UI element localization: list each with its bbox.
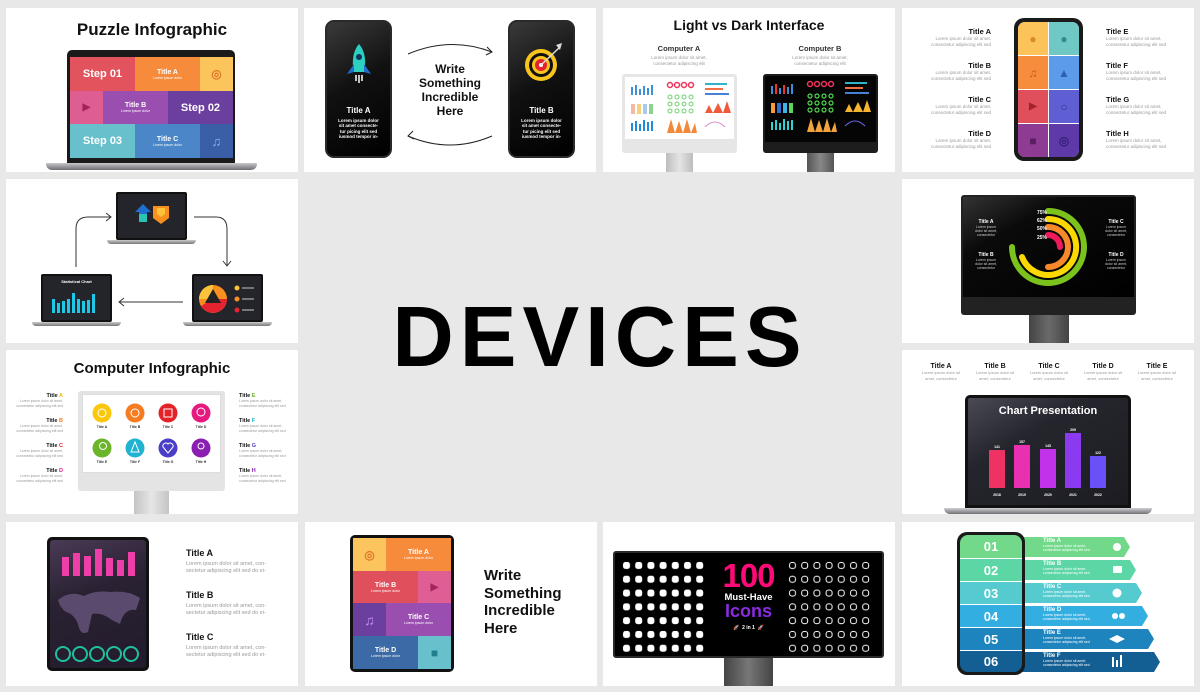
right titles E-H: Title H bbox=[239, 468, 256, 474]
titles A-C: sectetur adipiscing elit sed do ei- bbox=[186, 610, 266, 616]
column titles A-E: Lorem ipsum dolor sit bbox=[1084, 370, 1122, 375]
titles A B: dolor sit amet, bbox=[975, 262, 997, 266]
text: Write Something Incredible Here: Here bbox=[484, 620, 517, 636]
monitor: 100 bbox=[722, 557, 775, 594]
tile: 100 must-have icons monitor bbox=[603, 522, 895, 686]
right titles E-H: Lorem ipsum dolor sit amet, bbox=[239, 474, 282, 478]
laptop with bar chart: 209 bbox=[1070, 428, 1076, 432]
titles A B: dolor sit amet, bbox=[975, 229, 997, 233]
column titles A-E: Lorem ipsum dolor sit bbox=[1030, 370, 1068, 375]
ring chart bbox=[1009, 208, 1087, 286]
left titles A-D: Title D bbox=[968, 129, 991, 138]
puzzle grid: ♫ bbox=[212, 134, 221, 148]
titles A B: consectetur bbox=[977, 233, 995, 237]
titles C D: Title D bbox=[1108, 252, 1124, 258]
text: Write Something Incredible Here bbox=[419, 62, 481, 118]
phone with puzzle: ▲ bbox=[1058, 66, 1070, 80]
column titles A-E: Title D bbox=[1092, 363, 1114, 370]
column titles A-E: amet, consectetur bbox=[1141, 376, 1173, 380]
right titles E-H: consectetur adipiscing elit sed bbox=[1106, 110, 1166, 114]
ring labels: 25% bbox=[1037, 235, 1047, 241]
titles A-C: Lorem ipsum dolor sit amet, con- bbox=[186, 645, 266, 651]
titles A B: Title A bbox=[978, 219, 994, 225]
titles C D: Title C bbox=[1108, 219, 1124, 225]
tablet bbox=[47, 537, 149, 671]
tile: puzzle infographic laptop bbox=[6, 8, 298, 172]
tablet with puzzle: ▶ bbox=[431, 582, 438, 592]
puzzle grid bbox=[70, 57, 233, 158]
phone with numbers: 03 bbox=[984, 586, 998, 600]
titles C D: consectetur bbox=[1107, 233, 1125, 237]
phone A with rocket: Lorem ipsum dolor bbox=[338, 118, 379, 123]
right titles E-H: consectetur adipiscing elit sed bbox=[1106, 144, 1166, 148]
phone B with target: Title B bbox=[529, 106, 554, 115]
text: Write Something Incredible Here: Something bbox=[484, 584, 562, 602]
icon: target bbox=[525, 43, 562, 81]
phone B with target: Lorem ipsum dolor bbox=[521, 118, 562, 123]
phone A with rocket: tur picing elit sed bbox=[340, 129, 377, 134]
right titles E-H: consectetur adipiscing elit sed bbox=[1106, 42, 1166, 46]
right titles E-H: Title G bbox=[1106, 95, 1129, 104]
label: Computer B: Lorem ipsum dolor sit amet, bbox=[792, 55, 848, 60]
left titles A-D: Lorem ipsum dolor sit amet, bbox=[935, 138, 991, 143]
column titles A-E: Title C bbox=[1038, 363, 1060, 370]
puzzle grid: Step 03 bbox=[83, 135, 122, 147]
tablet with puzzle: Lorem ipsum dolor bbox=[404, 621, 433, 625]
titles C D: dolor sit amet, bbox=[1105, 262, 1127, 266]
monitor bbox=[613, 551, 884, 686]
arrow titles: Lorem ipsum dolor sit amet, bbox=[1043, 567, 1086, 571]
phone with puzzle: ○ bbox=[1060, 100, 1068, 114]
phone with puzzle: ▶ bbox=[1029, 101, 1037, 112]
left titles A-D: consectetur adipiscing elit sed bbox=[16, 428, 63, 432]
laptop with bar chart: 122 bbox=[1095, 451, 1101, 455]
column titles A-E bbox=[922, 362, 1176, 380]
label: Computer A: Computer A bbox=[658, 44, 700, 53]
tile: two phones bbox=[304, 8, 596, 172]
ring labels bbox=[1037, 210, 1047, 241]
left titles A-D: Title A bbox=[46, 393, 63, 399]
arrow titles bbox=[1043, 538, 1090, 667]
left titles A-D: Lorem ipsum dolor sit amet, bbox=[20, 424, 63, 428]
left titles A-D: Title A bbox=[968, 27, 991, 36]
right titles E-H: consectetur adipiscing elit sed bbox=[239, 478, 286, 482]
left titles A-D: consectetur adipiscing elit sed bbox=[931, 110, 991, 114]
monitor with icon circles: Title D bbox=[196, 425, 207, 429]
monitor bbox=[961, 195, 1136, 343]
label: Computer B bbox=[792, 44, 848, 66]
tablet with puzzle: Lorem ipsum dolor bbox=[371, 588, 400, 592]
label: Computer A: Lorem ipsum dolor sit amet, bbox=[651, 55, 707, 60]
titles C D: consectetur bbox=[1107, 266, 1125, 270]
arrows: cycle bbox=[407, 44, 493, 146]
column titles A-E: amet, consectetur bbox=[979, 376, 1011, 380]
left titles A-D: Title B bbox=[968, 61, 991, 70]
laptop with puzzle bbox=[46, 50, 257, 170]
right titles E-H: Lorem ipsum dolor sit amet, bbox=[239, 424, 282, 428]
right titles E-H: consectetur adipiscing elit sed bbox=[1106, 76, 1166, 80]
left titles A-D bbox=[16, 393, 63, 483]
titles A-C: Lorem ipsum dolor sit amet, con- bbox=[186, 603, 266, 609]
phone with numbers: 01 bbox=[984, 539, 998, 554]
puzzle grid: ◎ bbox=[211, 67, 222, 81]
text: Write Something Incredible Here: Something bbox=[419, 76, 481, 90]
puzzle grid: Step 01 bbox=[83, 68, 122, 80]
ring labels: 75% bbox=[1037, 210, 1047, 216]
laptop with bar chart: 2019 bbox=[1018, 493, 1026, 497]
right titles E-H bbox=[239, 393, 286, 483]
heading: Computer Infographic bbox=[74, 360, 230, 377]
titles C D: Lorem ipsum bbox=[1106, 225, 1126, 229]
phone A with rocket: Title A bbox=[346, 106, 370, 115]
tile: computer infographic bbox=[6, 350, 298, 514]
laptop: top bbox=[107, 192, 196, 244]
puzzle grid: Lorem ipsum dolor bbox=[153, 76, 182, 80]
phone with numbers: 06 bbox=[984, 654, 998, 669]
tile: three laptops cycle bbox=[6, 179, 298, 343]
arrow bands 01-06 bbox=[1022, 537, 1160, 672]
left titles A-D: consectetur adipiscing elit sed bbox=[931, 144, 991, 148]
right titles E-H: Title E bbox=[239, 393, 255, 399]
titles A B: consectetur bbox=[977, 266, 995, 270]
monitor with icon circles: Title H bbox=[196, 460, 207, 464]
tablet with puzzle: ♫ bbox=[364, 612, 375, 628]
phone with puzzle: ◎ bbox=[1059, 134, 1069, 148]
laptop with bar chart: 2021 bbox=[1069, 493, 1077, 497]
phone A with rocket: sit amet consecte- bbox=[339, 123, 378, 128]
monitor with icon circles: Title C bbox=[163, 425, 174, 429]
text: Write Something Incredible Here: Write bbox=[484, 567, 521, 584]
phone A with rocket bbox=[325, 20, 392, 158]
right titles E-H: Title F bbox=[239, 418, 255, 424]
phone with numbers: 05 bbox=[984, 632, 998, 646]
phone with numbers: 04 bbox=[984, 608, 998, 624]
right titles E-H: Lorem ipsum dolor sit amet, bbox=[1106, 36, 1162, 41]
tablet with puzzle bbox=[350, 535, 454, 672]
titles A-C: Title C bbox=[186, 632, 213, 642]
icon: rocket bbox=[347, 44, 371, 83]
text: Write Something Incredible Here: Incredible bbox=[422, 90, 478, 104]
laptop with bar chart: 2022 bbox=[1094, 493, 1102, 497]
phone B with target: tur picing elit sed bbox=[523, 129, 560, 134]
phone with puzzle: ● bbox=[1060, 32, 1068, 46]
arrow titles: Title A bbox=[1043, 538, 1061, 544]
left titles A-D: Title B bbox=[46, 418, 63, 424]
monitor with icon circles bbox=[78, 391, 225, 514]
left titles A-D bbox=[931, 27, 991, 149]
left titles A-D: consectetur adipiscing elit sed bbox=[16, 454, 63, 458]
left titles A-D: Title C bbox=[968, 95, 991, 104]
tablet with puzzle: ■ bbox=[431, 646, 438, 660]
tablet with puzzle: Title A bbox=[408, 549, 429, 556]
phone A with rocket: iusmod tempor in- bbox=[339, 134, 378, 139]
monitor with icon circles: Title E bbox=[97, 460, 108, 464]
heading: Puzzle Infographic: Puzzle Infographic bbox=[77, 20, 227, 39]
phone with numbers bbox=[957, 532, 1025, 675]
column titles A-E: Title B bbox=[984, 363, 1006, 370]
tile: monitor with ring chart bbox=[902, 179, 1194, 343]
puzzle grid: Title C bbox=[157, 136, 178, 142]
left titles A-D: Lorem ipsum dolor sit amet, bbox=[20, 449, 63, 453]
right titles E-H: consectetur adipiscing elit sed bbox=[239, 428, 286, 432]
titles C D: dolor sit amet, bbox=[1105, 229, 1127, 233]
laptop: statistical chart: Statistical Chart bbox=[61, 279, 92, 284]
arrow titles: Title E bbox=[1043, 630, 1061, 636]
puzzle grid: Title B bbox=[125, 102, 146, 109]
laptop: pie chart bbox=[183, 274, 272, 326]
titles A B bbox=[975, 219, 997, 270]
tile: phone with numbered arrows bbox=[902, 522, 1194, 686]
arrow titles: Lorem ipsum dolor sit amet, bbox=[1043, 636, 1086, 640]
arrow titles: Title B bbox=[1043, 561, 1061, 567]
arrow titles: consectetur adipiscing elit sed bbox=[1043, 571, 1090, 575]
puzzle grid: ▶ bbox=[83, 102, 90, 113]
monitor with icon circles: Title B bbox=[130, 425, 141, 429]
tile: phone puzzle with 8 titles bbox=[902, 8, 1194, 172]
left titles A-D: Lorem ipsum dolor sit amet, bbox=[935, 104, 991, 109]
laptop with bar chart: 2020 bbox=[1044, 493, 1052, 497]
arrow titles: Lorem ipsum dolor sit amet, bbox=[1043, 659, 1086, 663]
titles A-C: Title B bbox=[186, 590, 213, 600]
laptop with bar chart: 2018 bbox=[993, 493, 1001, 497]
phone with puzzle: ● bbox=[1029, 32, 1037, 46]
left titles A-D: Lorem ipsum dolor sit amet, bbox=[935, 70, 991, 75]
arrow titles: consectetur adipiscing elit sed bbox=[1043, 640, 1090, 644]
titles A-C: Title A bbox=[186, 548, 213, 558]
monitor: Must-Have bbox=[724, 592, 773, 603]
arrow titles: Title D bbox=[1043, 607, 1061, 613]
titles A B: Title B bbox=[978, 252, 994, 258]
titles A B: Lorem ipsum bbox=[976, 225, 996, 229]
phone with numbers: 02 bbox=[984, 562, 998, 578]
phone with puzzle: ■ bbox=[1029, 134, 1037, 148]
arrow titles: Lorem ipsum dolor sit amet, bbox=[1043, 613, 1086, 617]
tablet with puzzle: ◎ bbox=[364, 548, 375, 562]
right titles E-H: consectetur adipiscing elit sed bbox=[239, 454, 286, 458]
label: Computer B: Computer B bbox=[799, 44, 841, 53]
column titles A-E: Lorem ipsum dolor sit bbox=[922, 370, 960, 375]
phone with puzzle bbox=[1014, 18, 1083, 161]
titles A-C: sectetur adipiscing elit sed do ei- bbox=[186, 652, 266, 658]
titles A B: Lorem ipsum bbox=[976, 258, 996, 262]
text: Write Something Incredible Here: Incredible bbox=[484, 602, 555, 619]
right titles E-H: Lorem ipsum dolor sit amet, bbox=[1106, 104, 1162, 109]
text: Write Something Incredible Here: Here bbox=[437, 104, 463, 118]
puzzle grid: Step 02 bbox=[181, 102, 220, 114]
phone B with target bbox=[508, 20, 575, 158]
ring labels: 62% bbox=[1037, 218, 1047, 224]
right titles E-H: Title G bbox=[239, 443, 256, 449]
titles A-C bbox=[186, 548, 266, 658]
column titles A-E: Lorem ipsum dolor sit bbox=[1138, 370, 1176, 375]
monitor: Icons bbox=[725, 601, 772, 621]
left titles A-D: consectetur adipiscing elit sed bbox=[16, 404, 63, 408]
column titles A-E: amet, consectetur bbox=[1033, 376, 1065, 380]
arrow titles: consectetur adipiscing elit sed bbox=[1043, 663, 1090, 667]
tile: light vs dark interface bbox=[603, 8, 895, 172]
right titles E-H: Title H bbox=[1106, 129, 1129, 138]
column titles A-E: amet, consectetur bbox=[1087, 376, 1119, 380]
laptop with bar chart: 157 bbox=[1019, 440, 1025, 444]
arrow titles: Title C bbox=[1043, 584, 1061, 590]
laptop with bar chart: 141 bbox=[994, 445, 1000, 449]
text: Write Something Incredible Here: Write bbox=[435, 62, 465, 76]
monitor: 🚀 2 in 1 🚀 bbox=[733, 625, 764, 631]
titles C D: Lorem ipsum bbox=[1106, 258, 1126, 262]
monitor with icon circles: Title G bbox=[163, 460, 174, 464]
column titles A-E: amet, consectetur bbox=[925, 376, 957, 380]
heading: Light vs Dark Interface bbox=[674, 17, 824, 33]
right titles E-H: Lorem ipsum dolor sit amet, bbox=[1106, 70, 1162, 75]
monitor with icon circles: Title F bbox=[130, 460, 141, 464]
titles A-C: sectetur adipiscing elit sed do ei- bbox=[186, 568, 266, 574]
column titles A-E: Lorem ipsum dolor sit bbox=[976, 370, 1014, 375]
arrows: cycle between laptops bbox=[76, 212, 232, 306]
arrow titles: Lorem ipsum dolor sit amet, bbox=[1043, 544, 1086, 548]
right titles E-H: Title E bbox=[1106, 27, 1128, 36]
left titles A-D: consectetur adipiscing elit sed bbox=[931, 42, 991, 46]
phone with puzzle: ♫ bbox=[1028, 66, 1038, 80]
puzzle grid: Lorem ipsum dolor bbox=[153, 142, 182, 146]
phone B with target: sit amet consecte- bbox=[522, 123, 561, 128]
puzzle grid: Title A bbox=[157, 68, 178, 76]
tablet with puzzle: Lorem ipsum dolor bbox=[371, 654, 400, 658]
label: Computer A bbox=[651, 44, 707, 66]
arrow titles: consectetur adipiscing elit sed bbox=[1043, 594, 1090, 598]
left titles A-D: Lorem ipsum dolor sit amet, bbox=[20, 474, 63, 478]
arrow titles: consectetur adipiscing elit sed bbox=[1043, 617, 1090, 621]
laptop with bar chart: 145 bbox=[1045, 444, 1051, 448]
left titles A-D: consectetur adipiscing elit sed bbox=[16, 478, 63, 482]
monitor with icon circles: Title A bbox=[97, 425, 108, 429]
tablet with puzzle: Title D bbox=[375, 647, 396, 654]
label: Computer B: consectetur adipiscing elit bbox=[794, 60, 846, 66]
label: Computer A: consectetur adipiscing elit bbox=[653, 60, 705, 66]
arrow titles: Title F bbox=[1043, 653, 1061, 659]
text: Write Something Incredible Here bbox=[484, 567, 562, 636]
left titles A-D: Title D bbox=[46, 468, 63, 474]
right titles E-H: Lorem ipsum dolor sit amet, bbox=[239, 449, 282, 453]
left titles A-D: Lorem ipsum dolor sit amet, bbox=[20, 399, 63, 403]
icon grids bbox=[622, 562, 870, 652]
tile: tablet puzzle bbox=[305, 522, 597, 686]
tablet with puzzle: Title C bbox=[408, 614, 429, 621]
arrow titles: Lorem ipsum dolor sit amet, bbox=[1043, 590, 1086, 594]
arrow titles: consectetur adipiscing elit sed bbox=[1043, 548, 1090, 552]
laptop with bar chart: Chart Presentation bbox=[999, 405, 1097, 417]
tile: chart presentation laptop bbox=[902, 350, 1194, 514]
column titles A-E: Title A bbox=[930, 363, 952, 370]
tablet with puzzle: Lorem ipsum dolor bbox=[404, 556, 433, 560]
right titles E-H: Lorem ipsum dolor sit amet, bbox=[1106, 138, 1162, 143]
left titles A-D: Lorem ipsum dolor sit amet, bbox=[935, 36, 991, 41]
right titles E-H: Lorem ipsum dolor sit amet, bbox=[239, 399, 282, 403]
right titles E-H: consectetur adipiscing elit sed bbox=[239, 404, 286, 408]
title: DEVICES: DEVICES bbox=[392, 290, 808, 385]
titles A-C: Lorem ipsum dolor sit amet, con- bbox=[186, 561, 266, 567]
titles C D bbox=[1105, 219, 1127, 270]
puzzle grid: Lorem ipsum dolor bbox=[121, 109, 150, 113]
right titles E-H: Title F bbox=[1106, 61, 1128, 70]
dark monitor bbox=[763, 74, 878, 172]
phone B with target: iusmod tempor in- bbox=[522, 134, 561, 139]
light monitor bbox=[622, 74, 737, 172]
right titles E-H bbox=[1106, 27, 1166, 149]
laptop with bar chart bbox=[944, 395, 1152, 514]
laptop: statistical chart bbox=[32, 274, 121, 326]
column titles A-E: Title E bbox=[1147, 363, 1167, 370]
ring labels: 50% bbox=[1037, 226, 1047, 232]
left titles A-D: consectetur adipiscing elit sed bbox=[931, 76, 991, 80]
tablet with puzzle: Title B bbox=[375, 582, 396, 588]
left titles A-D: Title C bbox=[46, 443, 63, 449]
tile: tablet dashboard with titles bbox=[6, 522, 298, 686]
